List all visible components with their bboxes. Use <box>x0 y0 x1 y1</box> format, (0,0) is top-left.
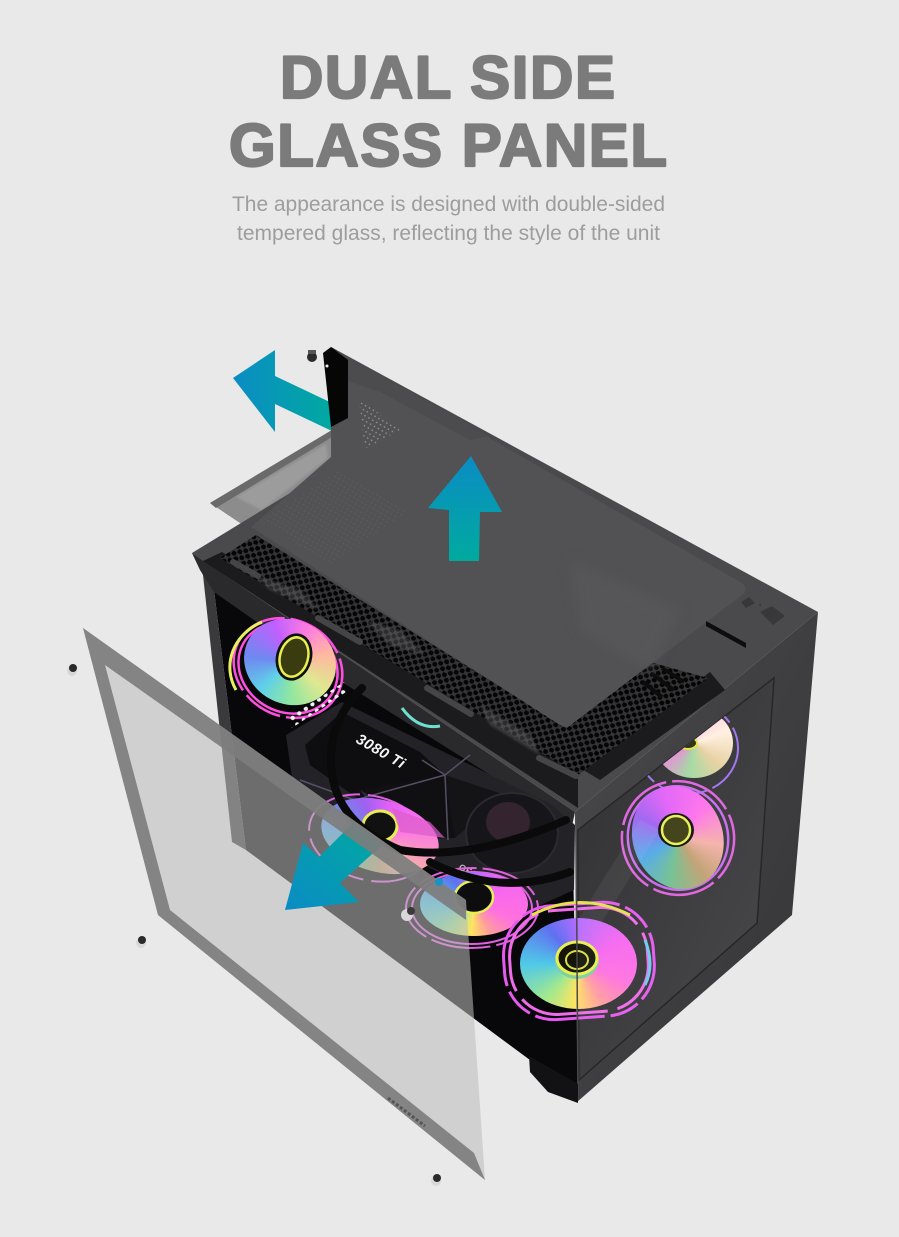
panel perforation <box>262 470 410 565</box>
mesh highlights <box>255 575 540 755</box>
side window middle fan <box>620 780 736 896</box>
mesh slots <box>233 562 576 776</box>
dark bezel around mesh <box>203 552 725 808</box>
screw 2 <box>136 936 146 948</box>
screw: back panel <box>307 350 317 362</box>
screw 4 <box>401 907 415 921</box>
top ports <box>706 597 785 648</box>
side window <box>578 678 774 1080</box>
top small fan arc <box>402 708 440 727</box>
dust filter mesh <box>210 430 332 531</box>
frame logo <box>388 1098 425 1126</box>
arrow: back panel out <box>233 350 334 432</box>
arrow: front panel out <box>285 823 382 910</box>
title: GLASS PANEL <box>229 112 667 179</box>
rear vents <box>643 668 684 697</box>
front panel screws <box>67 664 441 1186</box>
screw 3 <box>431 1174 441 1186</box>
top face <box>192 347 818 812</box>
front top band <box>192 553 575 826</box>
subtitle text: The appearance is designed with double-sided <box>232 193 665 216</box>
front panel hole <box>435 878 443 886</box>
foreground fan <box>500 899 658 1023</box>
rear bracket <box>323 347 348 427</box>
case side face <box>575 612 818 1102</box>
glass frame <box>83 628 485 1180</box>
front glass pane <box>83 628 485 1180</box>
graphics card <box>286 702 575 912</box>
subtitle text: tempered glass, reflecting the style of the unit <box>237 222 660 245</box>
case foot <box>529 1056 578 1103</box>
upper-left fan <box>216 599 360 737</box>
top mesh grille <box>220 535 708 775</box>
cooling tubes <box>331 688 570 883</box>
GPU model label: 3080 Ti <box>353 731 409 773</box>
side glass overlay on front fan <box>578 678 774 1080</box>
bottom-left fan <box>299 781 447 895</box>
arrow: top panel up <box>428 456 502 561</box>
top glass panel <box>251 347 746 727</box>
PC case <box>192 347 818 1103</box>
window reflection <box>578 820 660 960</box>
ventilation dots <box>359 400 400 449</box>
side window top-right fan <box>647 716 739 794</box>
left pillar <box>192 553 246 850</box>
title <box>229 44 667 179</box>
screw 1 <box>67 664 77 676</box>
GPU brand label: GEFORCE <box>457 862 504 893</box>
bottom-centre fan <box>406 868 538 948</box>
title: DUAL SIDE <box>280 44 615 111</box>
interior <box>214 590 578 1085</box>
case front edge <box>576 812 578 1100</box>
subtitle text <box>232 193 665 245</box>
fan corner white dots <box>288 682 346 728</box>
GPU blower fan <box>466 793 558 873</box>
